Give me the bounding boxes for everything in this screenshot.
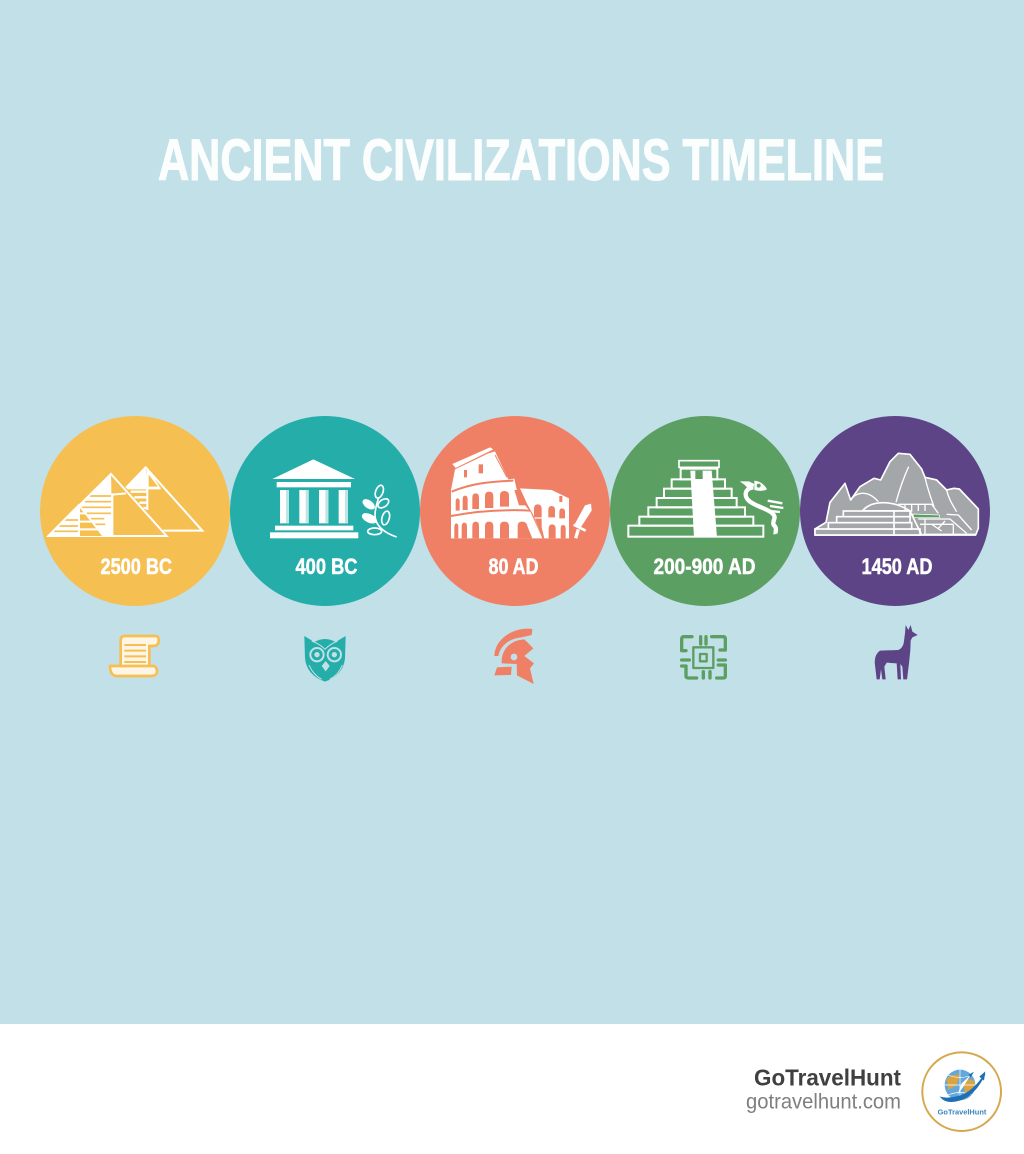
icon: glyph chip (682, 637, 725, 678)
logo globe (941, 1070, 985, 1101)
footer panel (0, 1024, 1024, 1154)
icon: pyramids (48, 467, 202, 536)
icon: temple (270, 459, 358, 538)
panel: Greece 400 BC (230, 416, 420, 606)
panel: Inca 1450 AD (800, 416, 990, 606)
icon: stepped pyramid (628, 461, 763, 537)
date label: 400 BC (296, 554, 358, 579)
icon: colosseum (451, 447, 569, 538)
icon: llama (875, 625, 918, 679)
icon: Machu Picchu (815, 453, 978, 535)
icon: owl (304, 636, 346, 682)
brand name: GoTravelHunt (754, 1065, 901, 1091)
date label: 80 AD (488, 554, 538, 579)
icon: spartan helmet (494, 629, 534, 684)
date label: 2500 BC (100, 554, 172, 579)
icon: olive branch (360, 484, 397, 537)
date label: 200-900 AD (654, 554, 756, 579)
icon: serpent (740, 481, 783, 534)
logo badge (922, 1052, 1001, 1131)
icon: scroll (110, 636, 159, 676)
panel: Egypt 2500 BC (40, 416, 230, 606)
panel: Maya 200-900 AD (610, 416, 800, 606)
date label: 1450 AD (862, 554, 932, 579)
logo wordmark: GoTravelHunt (938, 1110, 987, 1117)
brand url: gotravelhunt.com (746, 1090, 901, 1113)
icon: sword (574, 504, 592, 538)
panel: Rome 80 AD (420, 416, 610, 606)
